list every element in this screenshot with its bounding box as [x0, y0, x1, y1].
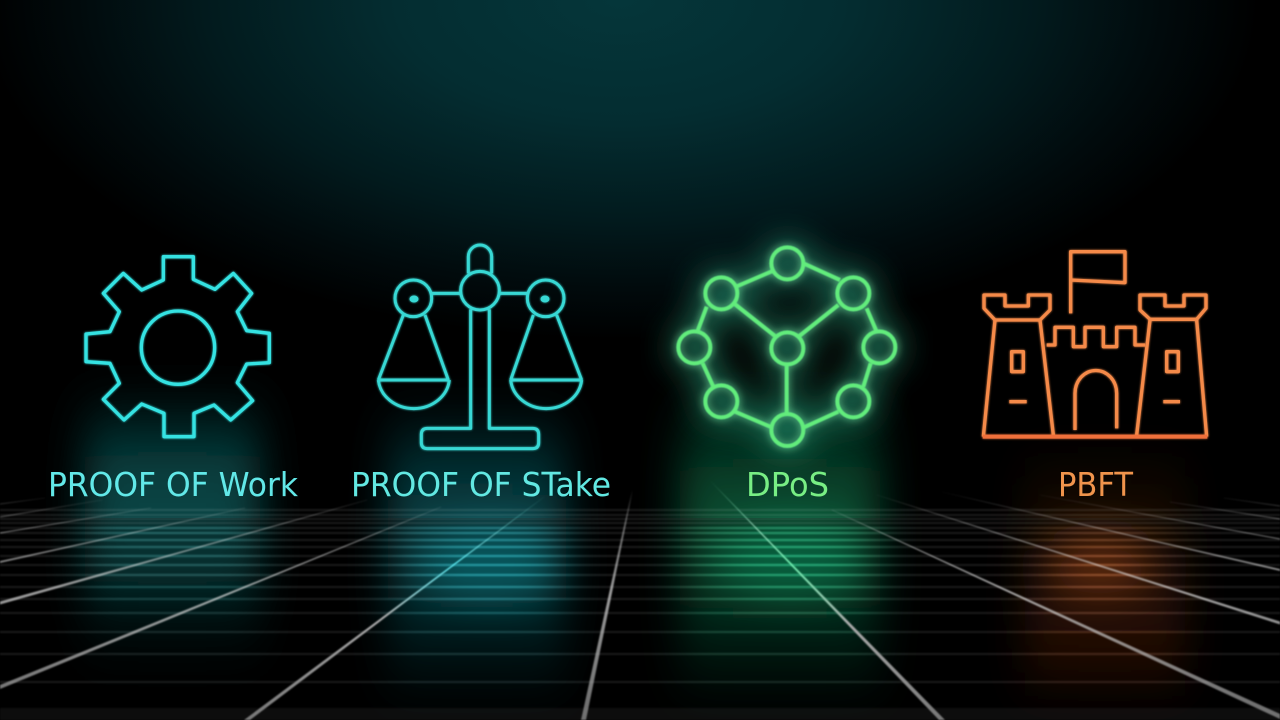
icon: node network [678, 247, 895, 446]
label: Proof of Work: PROOF OF Work [48, 465, 299, 504]
perspective floor grid [0, 478, 1280, 720]
label: Proof of Stake: PROOF OF STake [351, 465, 611, 504]
panel: Proof of Stake [351, 245, 611, 504]
panel: PBFT [983, 252, 1207, 504]
icon: castle [983, 252, 1207, 437]
panel: DPoS [678, 247, 895, 504]
label: PBFT: PBFT [1058, 465, 1134, 504]
floor light pools [85, 385, 1185, 710]
icon: gear [86, 257, 269, 437]
panel: Proof of Work [48, 257, 299, 504]
icon: balance scale [378, 245, 582, 449]
label: DPoS: DPoS [746, 465, 829, 504]
top teal glow [0, 0, 1280, 345]
